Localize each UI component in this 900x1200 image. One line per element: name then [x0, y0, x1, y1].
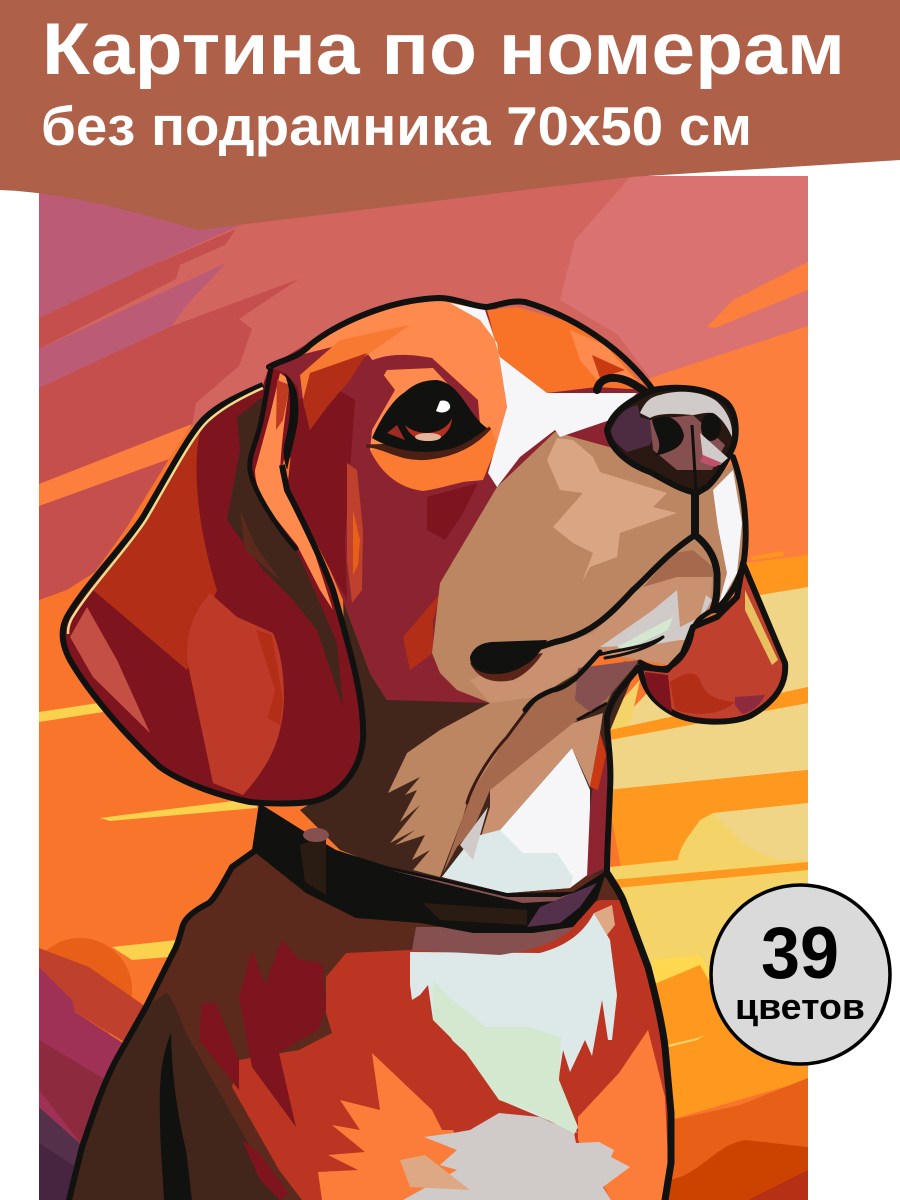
right ear [640, 563, 785, 722]
body and chest [69, 850, 671, 1200]
nose [607, 388, 736, 493]
mouth [470, 640, 547, 681]
head base [269, 298, 650, 703]
dog illustration [63, 298, 785, 1200]
dark red temple [287, 385, 355, 600]
neck [300, 600, 640, 893]
title: Картина по номерам [42, 9, 845, 90]
left ear [63, 367, 363, 804]
dark red cheek patches [427, 483, 478, 540]
white blaze [450, 303, 637, 487]
forehead orange [296, 298, 507, 490]
collar [252, 803, 607, 933]
painting: sunset background [28, 176, 808, 1200]
orange brow [487, 307, 647, 393]
badge label: цветов [735, 986, 865, 1027]
badge number: 39 [761, 913, 839, 994]
sky: right bands [745, 555, 808, 595]
head and muzzle outlines [269, 298, 746, 870]
header banner [0, 0, 900, 230]
sky: lower left hills [46, 938, 132, 1034]
badge: 39 colours [711, 885, 890, 1064]
eye [366, 380, 490, 459]
body outline [69, 850, 671, 1200]
subtitle: без подрамника 70х50 см [41, 95, 752, 157]
muzzle [432, 432, 745, 703]
